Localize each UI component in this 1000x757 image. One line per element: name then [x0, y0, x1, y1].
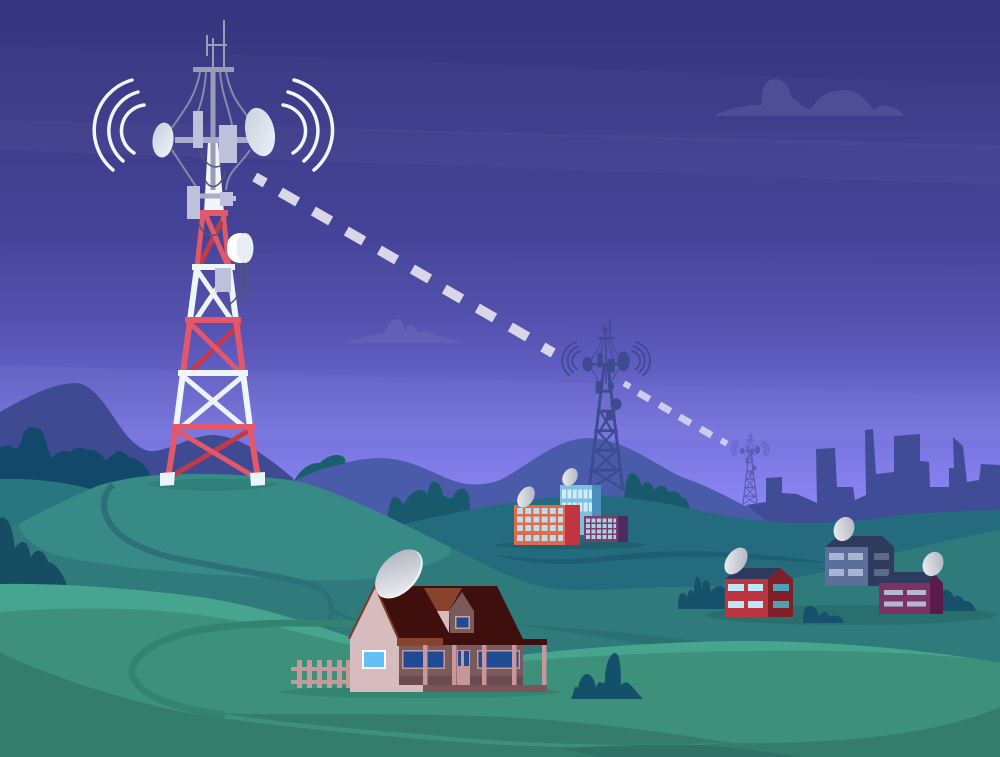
light mountain: [290, 438, 820, 570]
leaf: near big tower: [294, 455, 345, 481]
tower: upper white head: [204, 141, 224, 213]
purple house: [879, 572, 943, 614]
ring swoosh: [132, 623, 360, 715]
house: porch floor: [423, 685, 547, 692]
light green band: [0, 584, 1000, 757]
office cluster: [514, 465, 628, 545]
tower: panels: [187, 111, 237, 292]
left back hill: [0, 479, 110, 570]
tower: mast and antennas: [172, 20, 250, 196]
house: dormer: [424, 588, 474, 633]
tower: legs and bars: [168, 213, 258, 478]
house: [280, 541, 560, 698]
house: gable trim: [349, 586, 399, 640]
dark green lower wedge: [0, 652, 1000, 757]
dark swoosh line: back hill: [490, 551, 830, 564]
office: blue tower: [560, 485, 601, 535]
small distant tower: [731, 432, 769, 504]
house: front wall: [397, 645, 523, 685]
house: porch posts: [423, 645, 546, 685]
right neighbourhood: [720, 513, 976, 623]
tower: cables: [198, 150, 247, 306]
hill swoosh: [104, 485, 332, 624]
big tower base shadow: [147, 479, 280, 491]
large tower: [94, 20, 333, 486]
back mountains: [0, 383, 820, 570]
dark mountain: [0, 383, 300, 540]
bushes: far left: [0, 427, 156, 495]
bushes: right of medium tower: [624, 473, 692, 520]
bushes: under navy building: [803, 606, 844, 623]
medium distant tower: [562, 320, 650, 489]
main hill: [0, 474, 1000, 720]
bushes: left foreground: [0, 517, 68, 590]
house: door: [457, 650, 470, 685]
cloud: middle: [344, 319, 462, 343]
navy building: [825, 536, 894, 586]
house: gable wall: [350, 586, 423, 692]
tower: dishes: [151, 105, 279, 263]
hill swoosh tail: [333, 611, 360, 623]
signal dashes: big tower to medium tower: [252, 173, 556, 357]
bushes: behind hill center: [387, 482, 471, 525]
signal dashes: medium tower to small tower: [622, 381, 729, 446]
city skyline: [746, 429, 1000, 570]
house: shadow: [280, 686, 560, 698]
office: purple block: [584, 516, 628, 542]
house: fence: [291, 660, 350, 688]
house: roof: [375, 586, 547, 645]
bushes: right of red house: [678, 577, 730, 609]
cloud: upper right: [714, 79, 904, 116]
house: windows: [402, 650, 520, 669]
house: dish: [366, 541, 432, 607]
house: side window: [362, 650, 386, 669]
tower: signal waves: [94, 80, 333, 170]
dark band: [217, 713, 733, 745]
hill lobe: [19, 474, 451, 581]
red house: [725, 568, 793, 617]
tower: diagonals: [172, 213, 253, 476]
office and house ground shadows: [495, 541, 997, 625]
house: eave: [397, 638, 443, 646]
foreground hills: [0, 584, 1000, 757]
tower: feet: [160, 472, 265, 486]
office: dishes: [514, 465, 581, 511]
bushes: behind purple house: [940, 589, 976, 611]
bushes: foreground: [571, 653, 643, 699]
bottom wedge: [560, 745, 800, 757]
office: orange block: [514, 505, 580, 545]
lower hill swoosh: [515, 624, 705, 644]
teal back hill: [380, 495, 1000, 700]
dishes: houses: [720, 513, 947, 580]
mid green hill: [0, 609, 1000, 757]
